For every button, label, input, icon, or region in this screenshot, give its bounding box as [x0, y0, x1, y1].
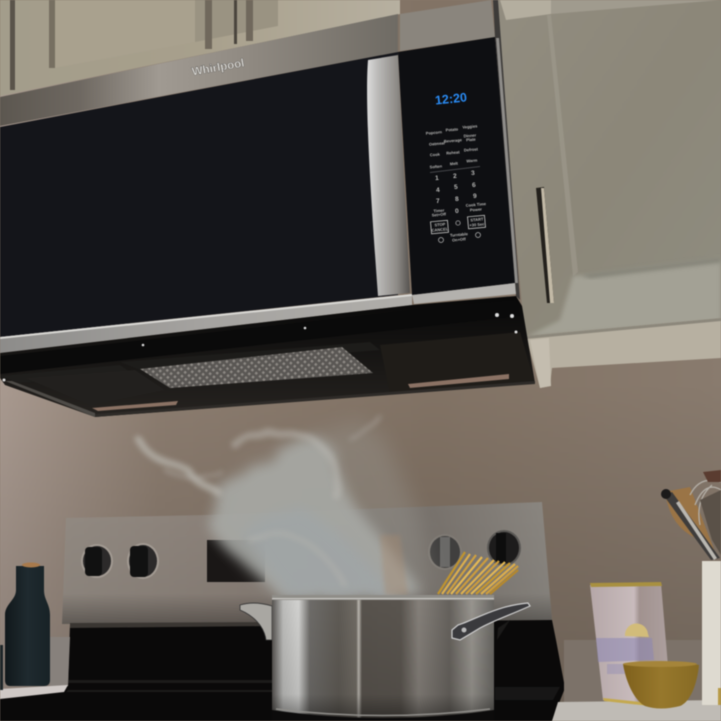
- door window: [0, 52, 398, 337]
- cabinet bottom moulding: [526, 318, 721, 388]
- control panel: [398, 0, 520, 304]
- main plume: [215, 437, 425, 595]
- keypad labels: 8: [455, 196, 459, 203]
- keypad labels: Warm: [466, 157, 478, 163]
- upper cabinets: [0, 0, 400, 96]
- keypad labels: Timer: [433, 208, 445, 213]
- top stainless strip: [0, 14, 398, 126]
- keypad labels: On+Off: [452, 236, 467, 243]
- wooden spatula: [664, 487, 715, 552]
- keypad labels: [426, 123, 487, 243]
- stop and start buttons: [431, 215, 485, 234]
- keypad labels: Reheat: [446, 149, 460, 156]
- stop and start buttons: CANCEL: [431, 226, 449, 233]
- keypad labels: Popcorn: [426, 129, 443, 136]
- stock pot: [240, 595, 530, 721]
- stove backguard: [62, 502, 552, 624]
- tin: [590, 582, 670, 706]
- keypad labels: 1: [435, 175, 439, 182]
- keypad labels: Set+Off: [432, 211, 447, 218]
- left knobs: [81, 543, 159, 579]
- right cabinet door: [495, 0, 721, 388]
- door handle: [367, 55, 410, 296]
- bottle and counter left: [0, 562, 70, 699]
- bowl: [623, 661, 699, 708]
- spaghetti: [438, 552, 518, 594]
- keypad labels: Cook: [430, 152, 441, 157]
- right counter objects: [552, 470, 721, 721]
- tongs: [664, 492, 720, 560]
- stop and start buttons: START: [470, 216, 484, 223]
- keypad labels: Plate: [466, 137, 477, 142]
- steam: [137, 415, 435, 595]
- whisk: [690, 480, 721, 525]
- cabinet handles: [205, 0, 253, 49]
- stop and start buttons: STOP: [434, 222, 446, 227]
- keypad labels: 2: [453, 173, 457, 180]
- logo: Whirlpool: [191, 57, 245, 78]
- keypad labels: Veggies: [462, 123, 478, 130]
- vents: [92, 401, 178, 411]
- keypad labels: Soften: [429, 163, 443, 170]
- stop and start buttons: +30 Sec: [469, 221, 485, 228]
- pepper mill: [5, 566, 50, 686]
- keypad labels: Turntable: [450, 231, 469, 238]
- lower door trim: [0, 294, 412, 353]
- keypad labels: 5: [454, 184, 458, 191]
- jar: [702, 561, 721, 705]
- right knobs: [428, 530, 521, 570]
- wisps: [137, 415, 378, 585]
- stove display: [207, 540, 265, 582]
- stove body: [0, 620, 565, 721]
- utensils: [661, 470, 721, 560]
- keypad labels: Oatmeal: [429, 140, 445, 147]
- haze: [215, 420, 435, 595]
- keypad labels: Cook Time: [466, 201, 487, 208]
- keypad labels: Defrost: [464, 146, 479, 153]
- left handle: [240, 603, 272, 640]
- microwave: [0, 0, 535, 417]
- keypad labels: 3: [471, 170, 475, 177]
- keypad labels: 6: [472, 182, 476, 189]
- underside hood: [0, 296, 535, 417]
- grease filter: [140, 347, 373, 388]
- keypad labels: Potato: [445, 126, 459, 133]
- keypad labels: 9: [473, 193, 477, 200]
- keypad labels: Power: [470, 206, 483, 213]
- keypad labels: Dinner: [463, 132, 477, 139]
- keypad labels: 4: [436, 187, 440, 194]
- cabinet door handle: [536, 187, 554, 303]
- keypad labels: Beverage: [444, 137, 463, 144]
- display: 12:20: [434, 90, 468, 108]
- keypad labels: 7: [436, 198, 440, 205]
- keypad labels: 0: [455, 208, 459, 215]
- right handle: [452, 603, 530, 640]
- keypad labels: Melt: [450, 161, 459, 166]
